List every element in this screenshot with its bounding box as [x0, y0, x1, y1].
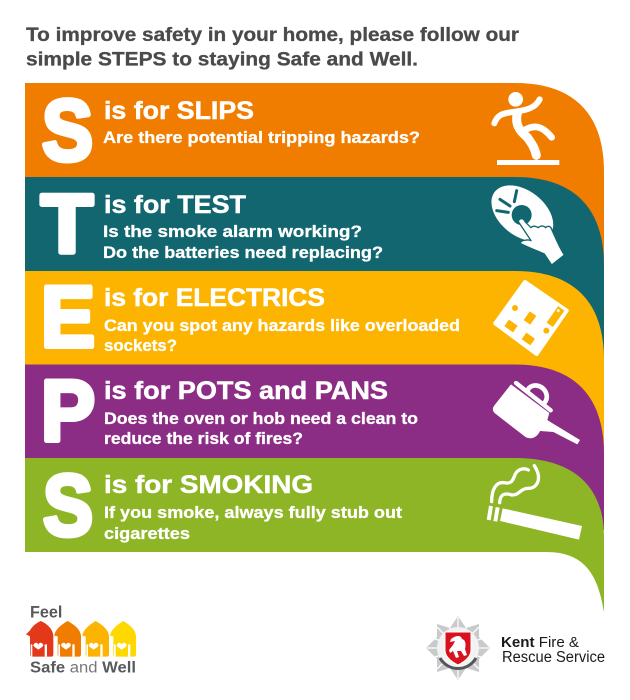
icon: smoke alarm test	[481, 174, 564, 265]
title: To improve safety in your home, please follow our	[26, 25, 520, 46]
text: test questions: Do the batteries need replacing?	[103, 244, 383, 262]
heading: slips: is for SLIPS	[104, 97, 254, 125]
logo: Feel Safe and Well	[26, 603, 136, 677]
text: test questions	[103, 223, 383, 262]
heading: smoking: is for SMOKING	[104, 471, 313, 499]
letter S: S	[42, 83, 93, 179]
logo text: Feel: Feel	[30, 603, 62, 622]
icon: cigarette	[489, 466, 582, 540]
icon: wall socket	[495, 282, 567, 354]
panel: E is for electrics	[25, 270, 604, 480]
logo text: Safe and Well: Safe and Well	[30, 660, 136, 677]
text: pots question	[104, 410, 418, 448]
text: pots question: reduce the risk of fires?	[104, 430, 303, 448]
title	[26, 25, 520, 70]
text: slips question: Are there potential tripping hazards?	[103, 129, 420, 147]
letter S: S	[43, 458, 93, 554]
logo houses	[26, 621, 136, 657]
panel: P is for pots and pans	[25, 364, 604, 530]
heading: electrics: is for ELECTRICS	[104, 284, 325, 312]
text: test questions: Is the smoke alarm working?	[103, 223, 362, 241]
text: pots question: Does the oven or hob need a clean to	[104, 410, 418, 428]
logo text: Kent Fire and Rescue Service	[501, 634, 605, 666]
icon: saucepan	[493, 383, 580, 444]
logo: fire service crest	[426, 616, 490, 680]
letter T: T	[41, 177, 93, 270]
letter P: P	[41, 364, 95, 460]
letter E: E	[41, 270, 95, 366]
panel: S is for smoking	[25, 458, 604, 612]
panel: S is for slips	[25, 83, 604, 300]
text: electrics question: Can you spot any hazards like overloaded	[104, 317, 460, 335]
text: electrics question	[104, 317, 460, 355]
title: simple STEPS to staying Safe and Well.	[26, 50, 418, 70]
logo text: Kent Fire and Rescue Service: Rescue Service	[502, 649, 605, 666]
heading: pots and pans: is for POTS and PANS	[104, 377, 388, 405]
panel: T is for test	[25, 177, 604, 400]
text: smoking advice	[104, 504, 403, 543]
text: smoking advice: If you smoke, always fully stub out	[104, 504, 403, 522]
text: smoking advice: cigarettes	[104, 525, 190, 543]
text: electrics question: sockets?	[104, 337, 177, 355]
logo text: Kent Fire and Rescue Service: Kent Fire &	[501, 634, 579, 651]
heading: test: is for TEST	[104, 191, 246, 219]
icon: slipping person	[494, 92, 559, 165]
